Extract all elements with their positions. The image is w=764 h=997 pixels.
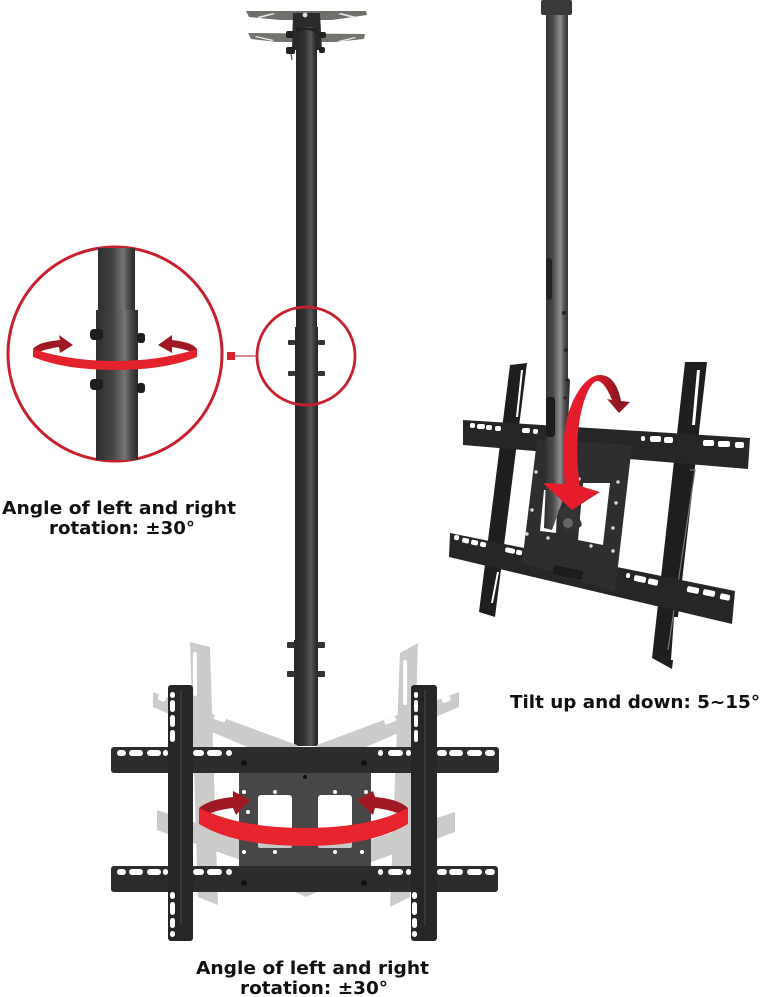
tilted vertical rails	[479, 362, 707, 669]
caption: swivel rotation: Angle of left and right	[196, 958, 429, 979]
tilt pole	[541, 0, 583, 532]
main pole	[287, 27, 325, 746]
tilt arrow	[543, 375, 630, 510]
caption: swivel rotation	[196, 958, 429, 997]
caption: pole rotation: rotation: ±30°	[49, 518, 195, 539]
detail rotation arrow	[33, 335, 197, 370]
caption: pole rotation	[2, 498, 236, 539]
zoom marker: small circle and connector	[227, 307, 355, 405]
swivel rotation arrow	[199, 791, 408, 846]
detail pole	[90, 248, 145, 460]
tilted horizontal rails	[449, 420, 750, 624]
tilted bracket assembly	[449, 0, 750, 669]
swivel bracket: ghost positions	[153, 642, 459, 907]
swivel bracket: center plate	[239, 770, 371, 868]
caption: tilt: Tilt up and down: 5~15°	[510, 692, 760, 713]
tilted center plate	[522, 440, 632, 592]
swivel bracket: vertical rails	[168, 685, 437, 941]
swivel bracket: horizontal rails	[111, 747, 499, 892]
caption: pole rotation: Angle of left and right	[2, 498, 236, 519]
ceiling mount plate	[246, 11, 367, 60]
detail circle: pole rotation	[8, 247, 222, 461]
